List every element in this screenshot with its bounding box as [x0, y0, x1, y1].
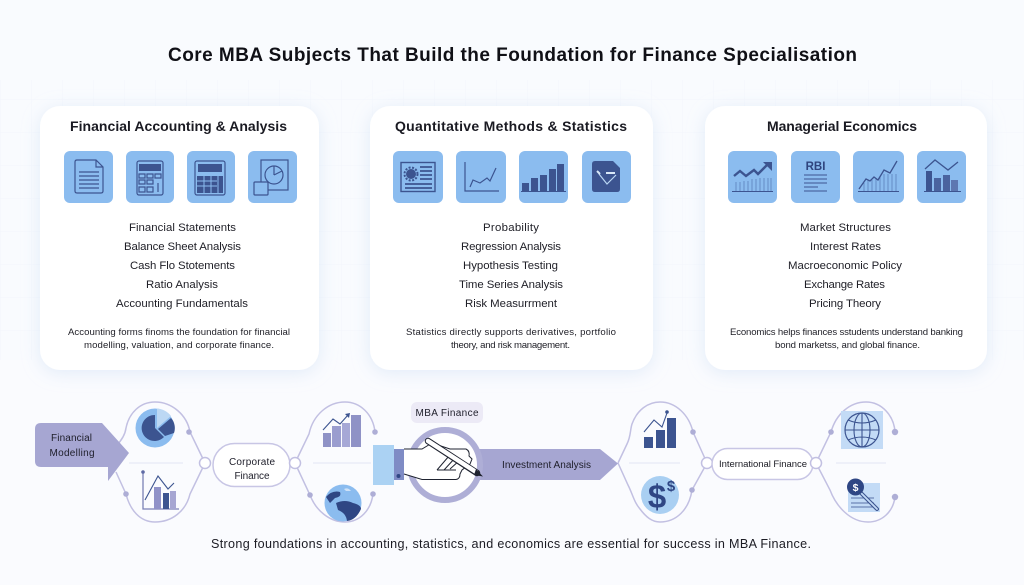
heading: Quantitative Methods & Statistics	[395, 118, 627, 134]
arrow: financial modelling: Modelling	[50, 448, 94, 459]
arrow: financial modelling: Financial	[51, 433, 92, 444]
icon: donut pie	[136, 408, 175, 448]
icon: combo chart	[141, 470, 179, 509]
node: international finance	[712, 448, 813, 480]
node: corporate finance: Finance	[234, 471, 270, 482]
junction: corporate right	[290, 458, 300, 468]
icon: dark calculator	[187, 151, 235, 203]
description	[730, 327, 963, 351]
topic list: Cash Flo Stotements	[130, 260, 235, 272]
topic list: Probability	[483, 222, 539, 234]
topic list: Pricing Theory	[809, 298, 881, 310]
node: international finance: International Finance	[719, 459, 807, 470]
icon: settings sheet	[393, 151, 443, 203]
icon: hand holding pen	[373, 430, 483, 500]
icon: calculator	[126, 151, 174, 203]
flow diagram	[35, 402, 898, 522]
closing statement: Strong foundations in accounting, statistics, and economics are essential for success in MBA Finance.	[211, 537, 811, 551]
topic list	[116, 222, 248, 310]
label: MBA finance	[411, 402, 483, 423]
icon: growth bars	[323, 413, 361, 447]
heading: Financial Accounting & Analysis	[70, 118, 287, 134]
description: modelling, valuation, and corporate finance.	[84, 340, 274, 351]
icon: earth	[324, 484, 362, 522]
icon: report with pie	[248, 151, 297, 203]
icon: rising trend	[728, 151, 777, 203]
description: Accounting forms finoms the foundation for financial	[68, 327, 290, 338]
arrow: investment analysis: Investment Analysis	[502, 460, 591, 471]
topic list: Exchange Rates	[804, 279, 885, 291]
junction: corporate left	[200, 458, 210, 468]
icon: dollar coin: $	[648, 478, 666, 515]
icon: document	[64, 151, 113, 203]
description: theory, and risk management.	[451, 340, 570, 351]
topic list: Time Series Analysis	[459, 279, 563, 291]
topic list	[459, 222, 563, 310]
connector outlines	[116, 402, 898, 522]
icon: market line	[853, 151, 904, 203]
icon: RBI report: RBI	[806, 161, 825, 173]
description	[68, 327, 290, 351]
title: Core MBA Subjects That Build the Foundation for Finance Specialisation	[168, 45, 857, 66]
arrow: financial modelling	[35, 423, 129, 481]
topic list: Market Structures	[800, 222, 891, 234]
icon: bars with trend	[917, 151, 966, 203]
icon: magnifier on document	[847, 478, 880, 512]
description: Statistics directly supports derivatives, portfolio	[406, 327, 616, 338]
icon: RBI report	[791, 151, 840, 203]
topic list: Risk Measurrment	[465, 298, 558, 310]
icon: dollar coin: $	[667, 478, 676, 495]
panel: quantitative methods and statistics	[370, 106, 653, 370]
topic list: Regression Analysis	[461, 241, 561, 253]
topic list: Financial Statements	[129, 222, 236, 234]
heading: Managerial Economics	[767, 118, 917, 134]
icon: dollar coin	[641, 476, 679, 515]
topic list: Balance Sheet Analysis	[124, 241, 241, 253]
junction: international right	[810, 458, 822, 468]
topic list: Hypothesis Testing	[463, 260, 558, 272]
label: MBA finance: MBA Finance	[416, 408, 479, 419]
icon: magnifier on document: $	[853, 482, 859, 494]
node: corporate finance: Corporate	[229, 457, 275, 468]
topic list: Ratio Analysis	[146, 279, 218, 291]
icon: rising bars	[644, 410, 676, 448]
icon: checked file	[582, 151, 631, 203]
topic list	[788, 222, 902, 310]
icon: line chart	[456, 151, 506, 203]
junction: international left	[702, 458, 712, 468]
description: bond marketss, and global finance.	[775, 340, 920, 351]
topic list: Interest Rates	[810, 241, 881, 253]
icon: bar chart	[519, 151, 568, 203]
topic list: Accounting Fundamentals	[116, 298, 248, 310]
arrow: investment analysis	[478, 449, 618, 480]
description: Economics helps finances sstudents understand banking	[730, 327, 963, 338]
panel: financial accounting and analysis	[40, 106, 319, 370]
icon: globe	[841, 411, 883, 449]
node: corporate finance	[213, 444, 290, 486]
panel: managerial economics	[705, 106, 987, 370]
topic list: Macroeconomic Policy	[788, 260, 902, 272]
description	[406, 327, 616, 351]
